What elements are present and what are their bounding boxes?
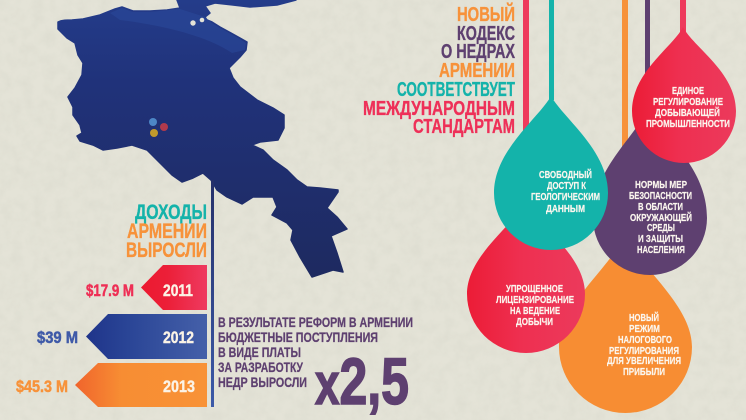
drop: safety norms: СРЕДЫ	[647, 222, 675, 234]
heading: new code	[363, 2, 515, 138]
arrow bar 2012	[37, 314, 207, 359]
arrow bar 2012: $39 М	[37, 328, 78, 347]
drop: new tax regime: НАЛОГОВОГО	[618, 334, 672, 346]
heading: new code: НОВЫЙ	[457, 2, 515, 26]
drop: simplified licensing: ДОБЫЧИ	[516, 316, 553, 328]
big multiplier: х2,5	[315, 344, 409, 418]
text block: reform result: В РЕЗУЛЬТАТЕ РЕФОРМ В АРМЕНИИ	[218, 315, 413, 330]
vertical divider line	[211, 180, 214, 407]
drop: free access	[494, 0, 608, 250]
drop: new tax regime: ПРИБЫЛИ	[623, 366, 665, 378]
drop: free access: ГЕОЛОГИЧЕСКИМ	[531, 191, 600, 203]
drop: new tax regime	[559, 0, 692, 413]
text block: reform result: НЕДР ВЫРОСЛИ	[218, 375, 307, 390]
location dots	[149, 118, 168, 137]
drop: simplified licensing: УПРОЩЕННОЕ	[506, 283, 563, 295]
drop: safety norms: БЕЗОПАСНОСТИ	[629, 190, 692, 202]
lake islets	[190, 18, 204, 26]
drop: new tax regime: РЕГУЛИРОВАНИЯ	[609, 345, 679, 357]
heading: new code: О НЕДРАХ	[441, 41, 515, 63]
text block: reform result: БЮДЖЕТНЫЕ ПОСТУПЛЕНИЯ	[218, 330, 378, 345]
arrow bar 2013	[16, 363, 207, 407]
drop: safety norms: И ЗАЩИТЫ	[638, 233, 683, 245]
arrow bar 2012: 2012	[163, 328, 194, 347]
drop: free access: ДАННЫМ	[546, 203, 585, 215]
drop: safety norms: ОКРУЖАЮЩЕЙ	[630, 211, 692, 224]
map of Armenia	[58, 0, 347, 277]
drop: simplified licensing: НА ВЕДЕНИЕ	[510, 305, 560, 317]
text block: reform result: В ВИДЕ ПЛАТЫ	[218, 345, 301, 360]
drop: unified regulation	[632, 0, 736, 163]
drop: safety norms: В ОБЛАСТИ	[638, 201, 683, 213]
heading: revenue grew: АРМЕНИИ	[127, 220, 207, 243]
arrow bar 2011	[86, 265, 207, 310]
drop: free access: ДОСТУП К	[547, 180, 586, 192]
heading: revenue grew	[126, 201, 207, 262]
heading: new code: СООТВЕТСТВУЕТ	[397, 79, 515, 101]
drop: new tax regime: РЕЖИМ	[629, 323, 660, 335]
heading: revenue grew: ДОХОДЫ	[135, 201, 207, 224]
drop: free access: СВОБОДНЫЙ	[539, 168, 592, 181]
heading: new code: СТАНДАРТАМ	[413, 116, 515, 138]
drop: safety norms: НАСЕЛЕНИЯ	[637, 244, 685, 256]
heading: revenue grew: ВЫРОСЛИ	[126, 239, 207, 262]
arrow bar 2013: 2013	[163, 377, 195, 396]
heading: new code: МЕЖДУНАРОДНЫМ	[363, 98, 515, 120]
heading: new code: АРМЕНИИ	[439, 60, 515, 82]
drop: safety norms: НОРМЫ МЕР	[635, 179, 687, 191]
map highlight	[110, 8, 246, 53]
drop: unified regulation: ЕДИНОЕ	[672, 85, 704, 97]
heading: new code: КОДЕКС	[457, 23, 515, 45]
text block: reform result: ЗА РАЗРАБОТКУ	[218, 360, 303, 375]
arrow bar 2011: $17.9 М	[86, 281, 134, 300]
drop: safety norms	[593, 0, 707, 275]
drop: new tax regime: НОВЫЙ	[629, 311, 659, 324]
arrow bar 2011: 2011	[163, 281, 193, 300]
arrow bar 2013: $45.3 М	[16, 377, 68, 396]
drop: unified regulation: ДОБЫВАЮЩЕЙ	[655, 106, 720, 119]
drop: simplified licensing: ЛИЦЕНЗИРОВАНИЕ	[496, 294, 574, 306]
drop: new tax regime: ДЛЯ УВЕЛИЧЕНИЯ	[607, 355, 681, 367]
drop: unified regulation: РЕГУЛИРОВАНИЕ	[653, 96, 723, 108]
drop: simplified licensing	[467, 0, 585, 353]
text block: reform result	[218, 315, 413, 390]
